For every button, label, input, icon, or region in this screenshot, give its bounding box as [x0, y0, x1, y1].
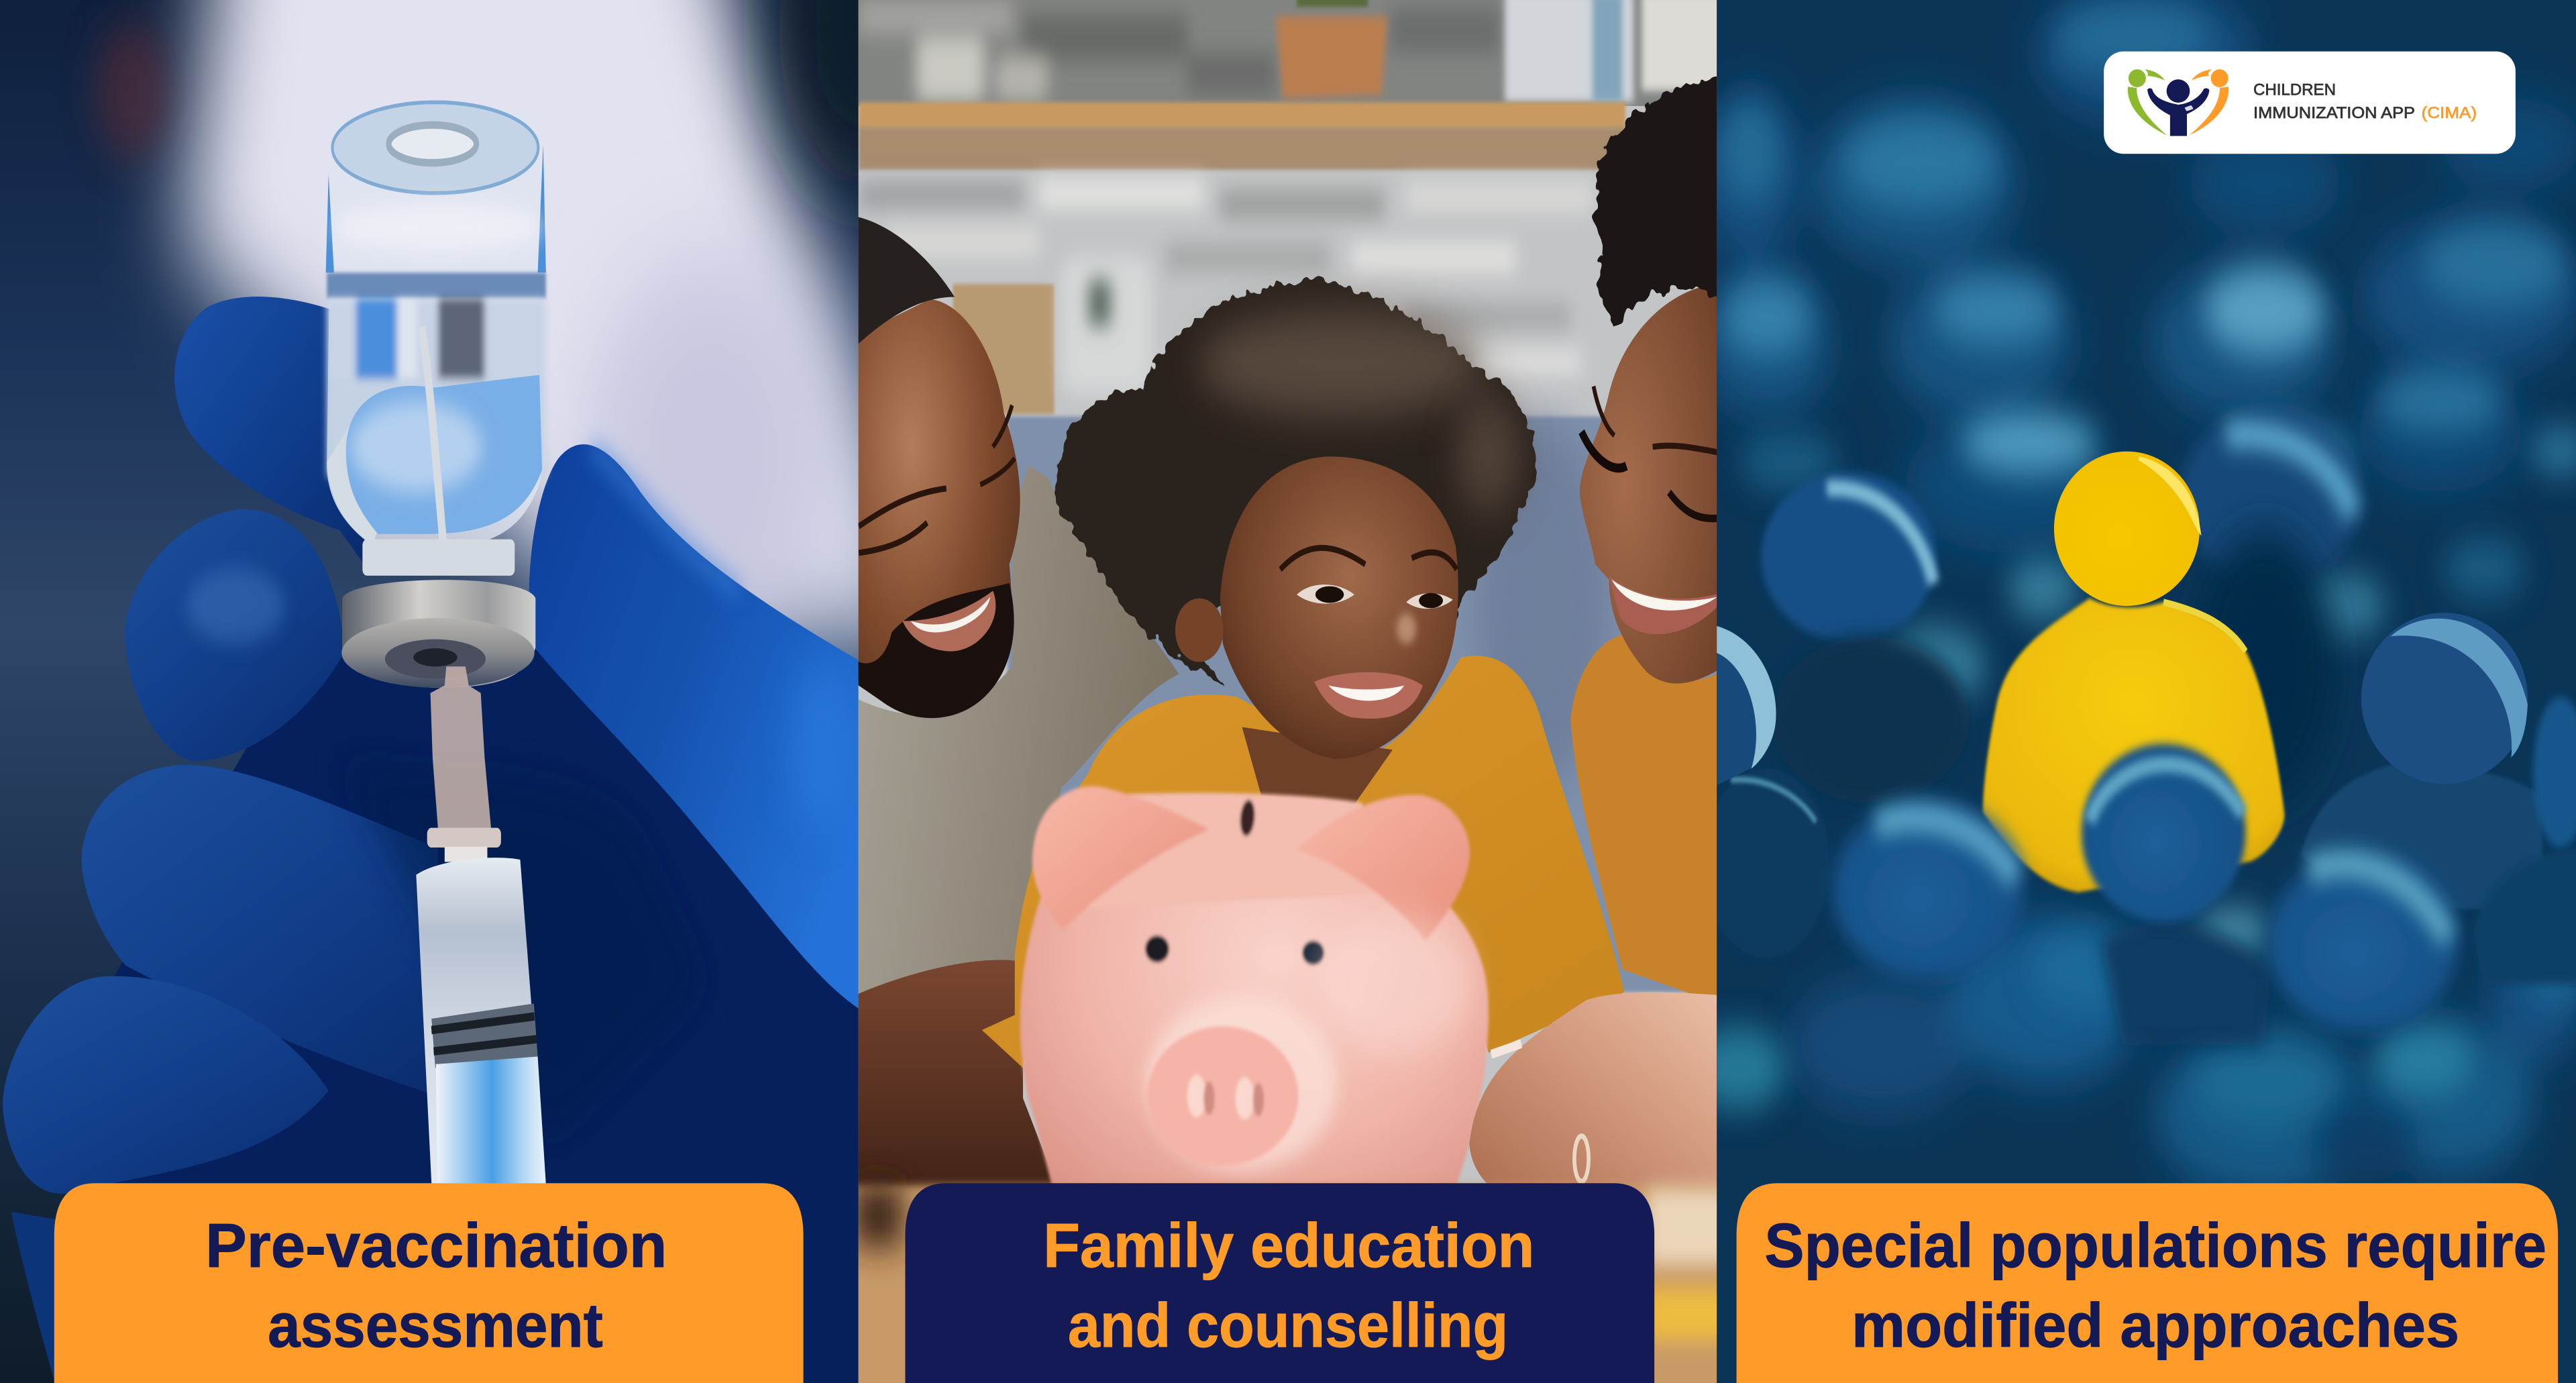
mid-ground figures: [1704, 409, 2361, 958]
icon: gloved hand: [3, 297, 876, 1383]
background shelf and wall: [853, 0, 1731, 1383]
foreground blue figures: [1712, 613, 2576, 1045]
caption: pre-vaccination assessment: assessment: [268, 1290, 603, 1360]
icon: piggy bank: [1020, 786, 1489, 1242]
logo text: (CIMA): [2422, 104, 2477, 122]
icon: syringe: [416, 666, 549, 1227]
background of blurred figures: [1693, 0, 2576, 1383]
caption: pre-vaccination assessment: [54, 1183, 804, 1383]
panel: pre-vaccination assessment photo: [0, 0, 953, 1383]
logo text: [2253, 81, 2477, 122]
caption: family education and counselling: and counselling: [1068, 1290, 1508, 1360]
man: [853, 216, 1179, 1212]
blurred studio background: [0, 0, 859, 1252]
icon: yellow figure: [1983, 452, 2285, 892]
logo badge: [2104, 52, 2516, 154]
child: [982, 278, 1624, 1068]
caption: family education and counselling: Family education: [1043, 1211, 1534, 1280]
caption: special populations require modified approaches: Special populations require: [1764, 1211, 2546, 1280]
mother's hand: [1469, 992, 1729, 1212]
icon: vaccine vial: [326, 102, 546, 688]
woman: [1570, 80, 1729, 1007]
panel: family education photo: [853, 0, 1735, 1383]
caption: special populations require modified approaches: modified approaches: [1851, 1290, 2459, 1360]
icon: CIMA logo: [2128, 69, 2229, 136]
caption: pre-vaccination assessment: Pre-vaccination: [205, 1211, 667, 1280]
caption: family education and counselling: [905, 1183, 1654, 1383]
table: [853, 1185, 1735, 1383]
panel: special populations photo: [1693, 0, 2576, 1383]
caption: special populations require modified approaches: [1737, 1183, 2558, 1383]
logo text: IMMUNIZATION APP: [2253, 104, 2415, 122]
logo text: CHILDREN: [2253, 81, 2336, 99]
